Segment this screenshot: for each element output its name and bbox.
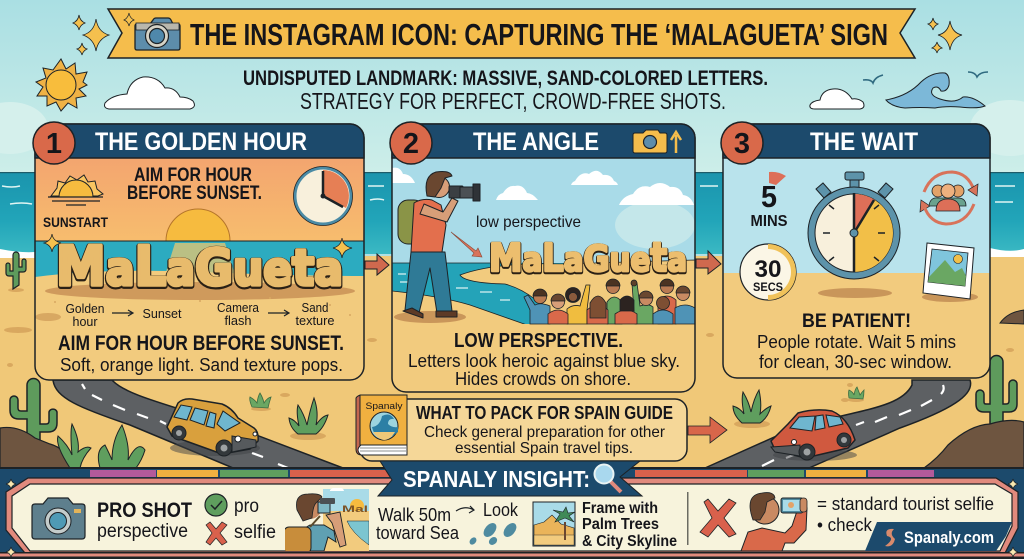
flow labels: texture bbox=[296, 313, 334, 328]
badge 1 bbox=[33, 122, 75, 164]
icon: 5 min wedge bbox=[769, 172, 786, 185]
panel 1 body line: Soft, orange light. Sand texture pops. bbox=[60, 354, 343, 375]
label: selfie: selfie bbox=[234, 522, 276, 543]
plant: left cluster bbox=[58, 424, 145, 468]
panel 2 bold line: LOW PERSPECTIVE. bbox=[454, 330, 623, 352]
text: before sunset: BEFORE SUNSET. bbox=[127, 183, 262, 204]
frame text: Frame with bbox=[582, 500, 658, 517]
frame text: & City Skyline bbox=[582, 533, 677, 550]
road: left bbox=[53, 380, 343, 468]
panel 3 header bbox=[723, 124, 990, 158]
flow labels: Sunset bbox=[142, 306, 182, 321]
frame text bbox=[582, 500, 677, 550]
sign: malagueta lettering: MaLaGueta bbox=[56, 235, 343, 298]
icon: clock bbox=[294, 166, 352, 226]
walk text: Walk 50m bbox=[378, 505, 451, 525]
flow labels: Camera bbox=[217, 300, 260, 315]
flow labels bbox=[66, 300, 334, 329]
label: 5 mins: MINS bbox=[750, 213, 788, 230]
callout text line 1: Check general preparation for other bbox=[424, 424, 666, 441]
badge: 30 secs: SECS bbox=[753, 280, 783, 294]
sparkle right of sign bbox=[333, 238, 352, 258]
car: red hatchback bbox=[771, 410, 857, 461]
flow labels: Golden bbox=[66, 301, 104, 316]
panel 3: the wait bbox=[721, 122, 990, 378]
banner: spanaly insight bbox=[378, 461, 642, 496]
plant: bush center bbox=[289, 398, 328, 440]
badge: 30 secs: 30 bbox=[754, 256, 782, 283]
panel 2 body line 1: Letters look heroic against blue sky. bbox=[408, 351, 680, 371]
selfie text line 1: = standard tourist selfie bbox=[817, 494, 994, 514]
icon: sun bbox=[36, 59, 87, 111]
icon: small cactus left bbox=[6, 252, 26, 292]
sparkle left of sign bbox=[44, 234, 61, 252]
title: camera icon bbox=[124, 13, 180, 50]
panel 2 header bbox=[392, 124, 695, 158]
sign: malagueta lettering: MaLaGueta bbox=[56, 236, 343, 299]
panel 1 bold line: AIM FOR HOUR BEFORE SUNSET. bbox=[58, 332, 344, 355]
sign: malagueta small: MaLaGueta bbox=[489, 236, 687, 282]
road: right bbox=[705, 380, 971, 468]
scene: photographer from behind bbox=[284, 487, 369, 553]
arrow: walk to look bbox=[456, 506, 474, 513]
sun setting bbox=[166, 209, 230, 241]
rock: left bbox=[0, 427, 78, 468]
text: aim for hour: AIM FOR HOUR bbox=[134, 165, 252, 186]
icon: big cactus left bbox=[10, 378, 57, 445]
panel 3 heading: THE WAIT bbox=[810, 128, 918, 156]
rock: right bbox=[924, 420, 1024, 468]
arrow: panel 1 to 2 bbox=[365, 254, 389, 275]
label: pro: pro bbox=[234, 496, 259, 517]
selfie text line 2: • check bbox=[817, 515, 873, 535]
label: low perspective: low perspective bbox=[476, 214, 581, 231]
flow labels: flash bbox=[224, 313, 252, 328]
car: yellow suv bbox=[167, 399, 260, 456]
icon: wave bbox=[886, 73, 985, 108]
panel 1: the golden hour bbox=[33, 122, 364, 380]
badge: spanaly.com: Spanaly.com bbox=[904, 529, 994, 547]
panel 2 heading: THE ANGLE bbox=[473, 128, 599, 156]
photographer bbox=[398, 172, 480, 318]
plant: small center left bbox=[250, 393, 271, 411]
arrow: callout to road bbox=[688, 417, 727, 443]
badge 3 bbox=[721, 122, 763, 164]
badge 2: 2 bbox=[403, 128, 419, 160]
icon: cloud right bbox=[810, 89, 864, 109]
plant: bush right bbox=[733, 390, 771, 428]
sign: malagueta small: MaLaGueta bbox=[489, 235, 687, 281]
label: 5 mins bbox=[750, 179, 788, 230]
icon: big cross bbox=[700, 499, 736, 537]
panel 2 body line 2: Hides crowds on shore. bbox=[455, 369, 631, 389]
badge 1: 1 bbox=[46, 128, 62, 160]
pro shot label bbox=[97, 499, 192, 542]
crowd bbox=[524, 279, 695, 324]
icon: cross bbox=[206, 522, 227, 545]
image: palm frame bbox=[533, 502, 575, 546]
rock: small right bbox=[1000, 310, 1024, 324]
panel 3 body line 1: People rotate. Wait 5 mins bbox=[757, 332, 956, 352]
panel 1 header bbox=[35, 124, 364, 158]
callout heading: WHAT TO PACK FOR SPAIN GUIDE bbox=[416, 403, 673, 423]
icon: camera with up arrow bbox=[633, 130, 681, 153]
pro shot label: PRO SHOT bbox=[97, 499, 192, 522]
sparkles: top left bbox=[73, 15, 109, 55]
icon: guide book: Spanaly bbox=[366, 401, 403, 412]
scene: selfie tourist bbox=[741, 493, 807, 551]
sparkles: top right bbox=[928, 18, 962, 53]
callout text line 2: essential Spain travel tips. bbox=[455, 440, 633, 457]
icon: cloud left bbox=[104, 77, 194, 109]
walk text: toward Sea bbox=[376, 523, 460, 543]
badge 3: 3 bbox=[734, 128, 750, 160]
panel 1 heading: THE GOLDEN HOUR bbox=[95, 128, 307, 156]
scene: photographer from behind: Mal bbox=[342, 504, 368, 514]
badge: 30 secs bbox=[740, 244, 796, 300]
road dashes bbox=[82, 384, 944, 468]
plant: small right bbox=[848, 387, 864, 402]
icon: guide book bbox=[356, 395, 407, 455]
icon: big cactus right bbox=[976, 356, 1017, 432]
icon: sunrise bbox=[48, 175, 103, 205]
label: sunstart: SUNSTART bbox=[43, 214, 108, 230]
panel 2: the angle bbox=[390, 122, 695, 392]
flow labels: Sand bbox=[302, 300, 328, 315]
label: look: Look bbox=[483, 500, 519, 520]
icon: polaroid bbox=[923, 243, 974, 299]
title banner bbox=[108, 9, 915, 58]
flow labels: hour bbox=[72, 314, 98, 329]
icon: magnifying glass bbox=[594, 464, 621, 492]
subtitle line 1: UNDISPUTED LANDMARK: MASSIVE, SAND-COLORED LETTERS. bbox=[243, 67, 768, 90]
icon: footprints bbox=[468, 521, 519, 547]
icon: check bbox=[205, 494, 227, 516]
callout: what to pack bbox=[356, 395, 687, 461]
label: 5 mins: 5 bbox=[761, 179, 777, 214]
walk text bbox=[376, 505, 460, 543]
icon: pro camera bbox=[32, 498, 85, 539]
pro shot label: perspective bbox=[97, 521, 188, 542]
footer band bbox=[0, 467, 1024, 559]
arrow: panel 2 to 3 bbox=[696, 251, 721, 274]
icon: rotating people bbox=[920, 172, 978, 224]
subtitle line 2: STRATEGY FOR PERFECT, CROWD-FREE SHOTS. bbox=[300, 88, 726, 114]
frame text: Palm Trees bbox=[582, 516, 659, 533]
arrow: to sign bbox=[451, 232, 482, 257]
panel 3 body line 2: for clean, 30-sec window. bbox=[759, 352, 952, 372]
badge: spanaly.com bbox=[865, 522, 1012, 551]
icon: stopwatch bbox=[808, 172, 900, 279]
banner text: SPANALY INSIGHT: bbox=[403, 466, 590, 492]
badge 2 bbox=[390, 122, 432, 164]
panel 3 bold line: BE PATIENT! bbox=[802, 311, 911, 332]
birds bbox=[863, 72, 988, 83]
